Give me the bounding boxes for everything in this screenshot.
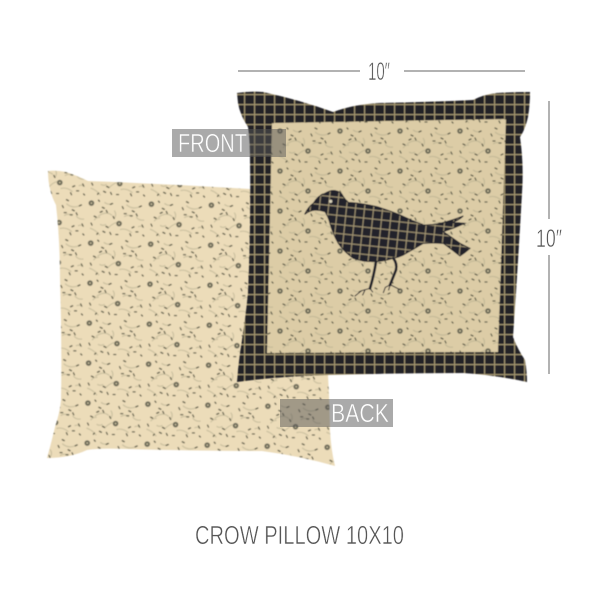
label: back: BACK	[331, 398, 390, 428]
title: CROW PILLOW 10X10	[195, 520, 404, 550]
floral centre panel	[267, 119, 506, 353]
back pillow	[47, 171, 335, 466]
height dimension: 10 inches: 10″	[536, 225, 562, 253]
width dimension: 10 inches: 10″	[368, 58, 390, 86]
plaid border	[237, 92, 530, 382]
icon: crow applique	[305, 191, 470, 296]
label: front: FRONT	[178, 128, 247, 158]
front pillow	[237, 92, 530, 382]
crow body	[305, 191, 470, 262]
crow legs and claws	[355, 258, 399, 296]
label: back	[280, 398, 393, 428]
crow eye	[329, 200, 332, 203]
